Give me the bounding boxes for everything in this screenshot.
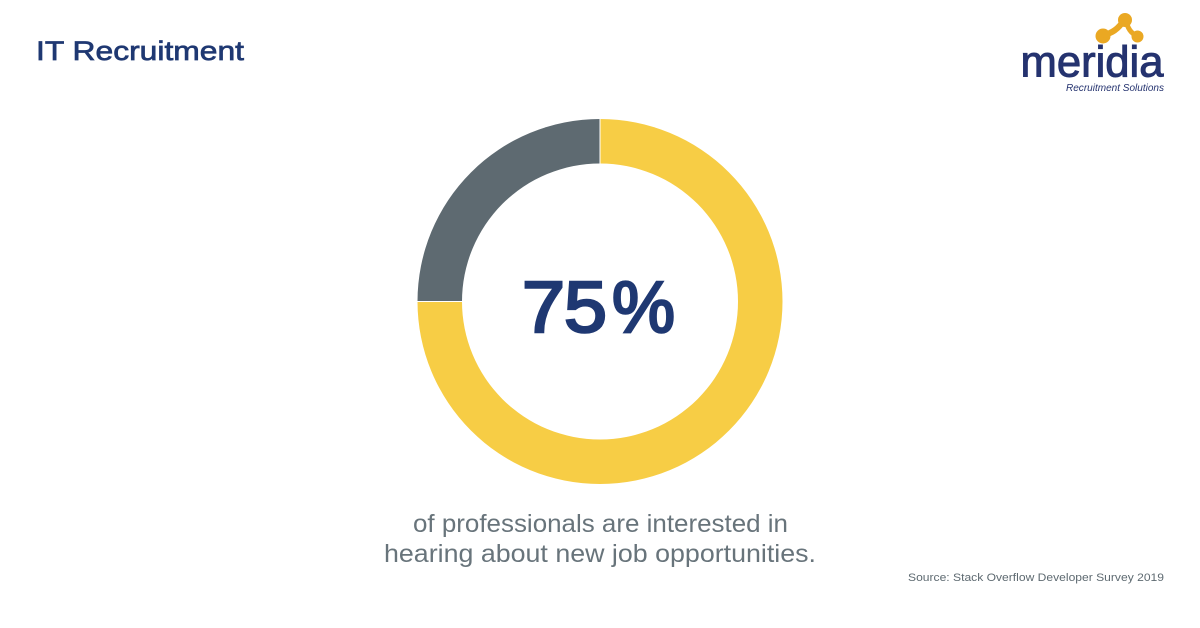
donut dividers (418, 119, 600, 302)
logo tagline: Recruitment Solutions (1066, 83, 1164, 94)
logo: meridia (1020, 13, 1164, 94)
headline statistic: 7 (522, 268, 565, 348)
donut chart: 75% (418, 119, 782, 484)
donut segment: 75% yellow (418, 119, 782, 484)
donut segment: 25% grey (418, 119, 600, 302)
icon: logo network mark (1096, 13, 1144, 44)
title: IT Recruitment (36, 36, 245, 66)
description text: of professionals are interested in (413, 510, 788, 538)
headline statistic: 5 (564, 268, 607, 348)
headline statistic: % (612, 268, 675, 348)
description text: hearing about new job opportunities. (384, 540, 816, 568)
source note: Source: Stack Overflow Developer Survey 2019 (908, 572, 1164, 584)
headline statistic (522, 268, 675, 348)
description text (384, 510, 816, 568)
logo wordmark: meridia (1020, 38, 1164, 86)
